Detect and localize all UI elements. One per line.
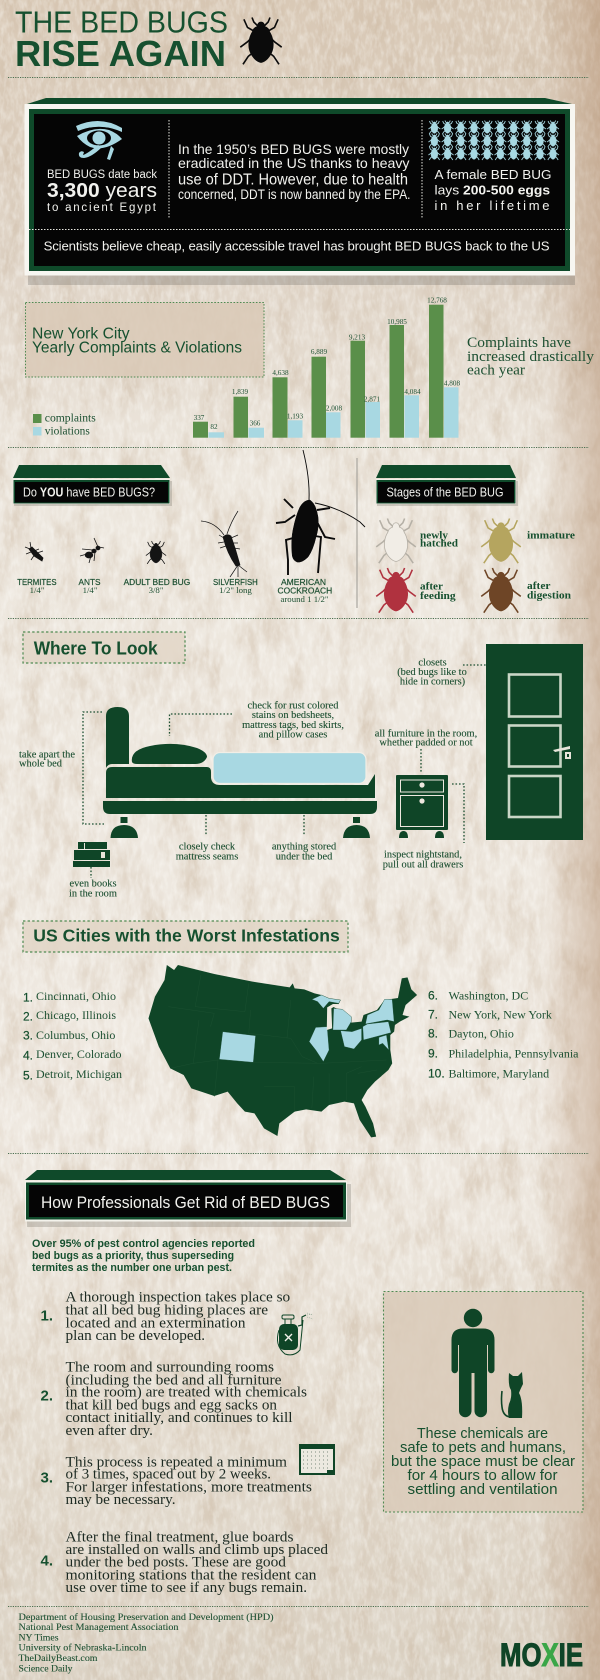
blue states [219, 995, 394, 1062]
city list 6-10: 7. [428, 1008, 438, 1022]
stage: immature: immature [527, 530, 576, 542]
step 3: of 3 times, spaced out by 2 weeks. [66, 1466, 271, 1482]
legend: violations [45, 426, 90, 438]
city list 1-5: 3. [23, 1028, 33, 1042]
city list 1-5: 1. [23, 990, 33, 1004]
stage: newly hatched [376, 518, 458, 563]
step 2 [40, 1360, 307, 1439]
insect labels: COCKROACH [278, 586, 332, 596]
bed callouts: under the bed [276, 852, 333, 862]
stage: after digestion: digestion [527, 590, 571, 602]
text: over 95%: Over 95% of pest control agencies reported [32, 1238, 255, 1250]
insect labels: 3/8" [149, 585, 164, 595]
city list 1-5: Cincinnati, Ohio [36, 989, 116, 1003]
city list 1-5: 5. [23, 1068, 33, 1082]
text: over 95%: termites as the number one urban pest. [32, 1262, 232, 1274]
city list 1-5: 4. [23, 1048, 33, 1062]
text: DDT history: eradicated in the US thanks to heavy [178, 155, 410, 171]
bar chart: 4,808 [444, 380, 460, 388]
text: over 95%: bed bugs as a priority, thus superseding [32, 1250, 234, 1262]
panel: safety note [384, 1292, 583, 1512]
sources [18, 1612, 274, 1674]
step 2: 2. [40, 1388, 53, 1404]
city list 6-10: New York, New York [448, 1008, 552, 1022]
step 3 [40, 1454, 312, 1508]
text: 3,300 years [47, 169, 157, 214]
stage: immature [481, 518, 576, 563]
icon: sprayer [277, 1313, 313, 1355]
bar chart: 6,889 [311, 348, 327, 356]
panel: New York City chart title: New York City [32, 326, 130, 342]
icon: calendar [299, 1444, 335, 1475]
text: DDT history [178, 141, 410, 202]
insect labels: SILVERFISH [213, 577, 258, 587]
insect labels: TERMITES [17, 577, 57, 587]
text: 3,300 years: BED BUGS date back [47, 169, 157, 181]
stage: after digestion: after [527, 581, 551, 592]
step 1: that all bed bug hiding places are [66, 1302, 268, 1318]
text: safety note: safe to pets and humans, [400, 1439, 566, 1456]
sources: NY Times [18, 1632, 59, 1644]
bed callouts: and pillow cases [259, 730, 327, 740]
icon: bed [103, 707, 377, 838]
logo: MOXIE: MOXIE [500, 1637, 583, 1673]
insect labels: around 1 1/2" [280, 594, 329, 604]
step 2: The room and surrounding rooms [66, 1360, 274, 1376]
city list 1-5: Chicago, Illinois [36, 1008, 116, 1022]
panel: New York City chart title: Yearly Complaints & Violations [32, 340, 242, 356]
icon: termite [25, 542, 43, 561]
bar chart: 12,768 [427, 296, 447, 304]
bed callouts: hide in corners) [400, 676, 465, 688]
bar chart: 4,638 [272, 369, 289, 377]
bed callouts: (bed bugs like to [397, 667, 467, 678]
bar chart [193, 296, 460, 438]
icon: person [452, 1309, 494, 1417]
title: RISE AGAIN [15, 33, 226, 74]
step 4: After the final treatment, glue boards [66, 1530, 294, 1546]
legend [33, 412, 96, 438]
legend: complaints [45, 412, 96, 424]
icon: cat [502, 1372, 523, 1418]
bed callouts: all furniture in the room, [375, 728, 477, 740]
step 4: under the bed posts. These are good [66, 1554, 287, 1570]
heading: Do YOU have BED BUGS [13, 465, 172, 506]
panel roof [27, 98, 572, 104]
icon: title bed bug [240, 18, 282, 64]
insect labels: 1/4" [30, 585, 45, 595]
text: egg count: lays 200-500 eggs [434, 184, 550, 198]
chart note: each year [467, 362, 525, 378]
step 4 [40, 1530, 329, 1596]
chart note [467, 335, 595, 378]
city list 6-10: 10. [428, 1066, 445, 1080]
heading: Do YOU have BED BUGS: Do YOU have BED BUGS? [23, 486, 155, 500]
bed callouts: mattress tags, bed skirts, [242, 720, 344, 731]
heading: US Cities [23, 921, 348, 952]
insect labels: 1/2" long [219, 585, 252, 595]
city list 6-10: 9. [428, 1046, 438, 1060]
bar chart: 9,213 [349, 334, 365, 342]
city list 1-5: 2. [23, 1010, 33, 1024]
icon: silverfish [201, 511, 247, 577]
step 1 [40, 1290, 290, 1344]
text: safety note: but the space must be clear [391, 1453, 575, 1470]
chart note: Complaints have [467, 335, 571, 351]
city list 1-5: Columbus, Ohio [36, 1028, 115, 1042]
city list 6-10: Baltimore, Maryland [448, 1066, 549, 1080]
step 4: are installed on walls and climb ups placed [66, 1542, 329, 1558]
step 3: may be necessary. [66, 1492, 176, 1508]
bed callouts: inspect nightstand, [384, 850, 462, 860]
bed callouts: pull out all drawers [383, 860, 463, 870]
city list 6-10: Philadelphia, Pennsylvania [448, 1046, 579, 1060]
city list 6-10: Dayton, Ohio [448, 1026, 514, 1040]
map: United States [148, 965, 417, 1137]
text: 3,300 years: to ancient Egypt [47, 202, 157, 214]
text: egg count [434, 167, 552, 213]
step 4: use over time to see if any bugs remain. [66, 1580, 307, 1596]
insect labels [17, 577, 332, 604]
text: safety note: settling and ventilation [408, 1481, 558, 1498]
city list 6-10 [428, 988, 579, 1080]
panel: bed bug history [24, 98, 575, 285]
icon: books [73, 842, 110, 867]
stage: newly hatched: hatched [420, 538, 458, 550]
step 4: monitoring stations that the resident can [66, 1568, 317, 1584]
step 2: in the room) are treated with chemicals [66, 1384, 307, 1400]
chart note: increased drastically [467, 349, 595, 365]
title: THE BED BUGS [15, 6, 228, 40]
insect labels: AMERICAN [281, 577, 326, 587]
icon: adult bed bug [146, 541, 166, 564]
heading: Where To Look: Where To Look [34, 638, 159, 658]
heading: How Professionals Get Rid of BED BUGS [25, 1170, 351, 1227]
step 3: 3. [40, 1470, 53, 1486]
bed callouts: check for rust colored [248, 700, 339, 712]
step 4: 4. [40, 1552, 53, 1570]
bed callouts: whether padded or not [379, 738, 473, 748]
bed callouts: mattress seams [176, 852, 238, 862]
bar chart: 337 [194, 414, 205, 422]
icon: nightstand [396, 775, 448, 838]
bed callouts: anything stored [272, 842, 337, 852]
heading: How Professionals Get Rid of BED BUGS: How Professionals Get Rid of BED BUGS [41, 1193, 330, 1212]
icon: door [486, 644, 583, 840]
sources: Science Daily [18, 1664, 73, 1674]
step 1: 1. [40, 1308, 53, 1324]
heading: Stages of the BED BUG [376, 465, 518, 506]
insect labels: ADULT BED BUG [124, 577, 190, 587]
text: safety note [391, 1425, 575, 1498]
text: DDT history: In the 1950’s BED BUGS were mostly [178, 141, 409, 157]
insect labels: 1/4" [83, 585, 98, 595]
text: egg count: in her lifetime [434, 198, 550, 213]
icon: eye of Horus [76, 121, 122, 160]
step 2: even after dry. [66, 1423, 153, 1439]
stage: after digestion [481, 568, 571, 613]
sources: TheDailyBeast.com [18, 1653, 98, 1664]
city list 1-5 [23, 989, 122, 1082]
bed callouts: stains on bedsheets, [252, 710, 334, 721]
step 3: This process is repeated a minimum [66, 1454, 288, 1470]
step 3: For larger infestations, more treatments [66, 1480, 312, 1496]
text: over 95% [32, 1238, 255, 1274]
text: safety note: for 4 hours to allow for [408, 1467, 558, 1484]
city list 1-5: Detroit, Michigan [36, 1067, 122, 1081]
bar chart: 2,008 [326, 404, 342, 412]
text: travel note: Scientists believe cheap, easily accessible travel has brought BED BUGS back to the US [44, 238, 550, 254]
sources: University of Nebraska-Lincoln [18, 1642, 147, 1654]
text: DDT history: use of DDT. However, due to health [178, 172, 408, 188]
text: egg count: A female BED BUG [434, 167, 552, 182]
bar chart: 4,084 [404, 388, 421, 396]
heading: US Cities: US Cities with the Worst Infestations [33, 926, 340, 946]
bar chart: 366 [250, 420, 261, 428]
step 1: located and an extermination [66, 1316, 246, 1332]
bar chart: 10,985 [387, 318, 407, 326]
icon: ant [80, 538, 104, 563]
bar chart: 1,193 [287, 412, 303, 420]
sources: National Pest Management Association [18, 1622, 179, 1633]
title [15, 6, 228, 74]
bed callouts: take apart the [19, 750, 75, 760]
bar chart: 82 [210, 423, 218, 431]
text: 3,300 years: 3,300 years [47, 180, 157, 202]
panel: New York City chart title [26, 302, 264, 377]
step 1: plan can be developed. [66, 1328, 205, 1344]
stage: after feeding [376, 568, 456, 613]
bed callouts: in the room [69, 888, 117, 900]
city list 1-5: Denver, Colorado [36, 1047, 122, 1061]
bar chart: 1,839 [232, 388, 248, 396]
sources: Department of Housing Preservation and Development (HPD) [18, 1612, 274, 1623]
city list 6-10: 6. [428, 988, 438, 1002]
bed callouts [19, 658, 486, 900]
heading: Stages of the BED BUG: Stages of the BED BUG [386, 486, 504, 500]
step 1: A thorough inspection takes place so [66, 1290, 290, 1306]
stage: after feeding: feeding [420, 591, 456, 602]
city list 6-10: Washington, DC [448, 988, 528, 1002]
step 2: contact initially, and continues to kill [66, 1410, 292, 1426]
insect labels: ANTS [78, 577, 101, 587]
heading: Where To Look [23, 632, 185, 663]
bed callouts: closely check [179, 842, 236, 852]
step 2: that kill bed bugs and egg sacks on [66, 1398, 278, 1414]
icon: American cockroach [276, 450, 365, 575]
bar chart: 2,871 [364, 396, 380, 404]
bed callouts: even books [69, 878, 117, 890]
city list 6-10: 8. [428, 1026, 438, 1040]
text: safety note: These chemicals are [417, 1425, 548, 1442]
bed callouts: closets [418, 658, 447, 668]
icon: bed bug egg grid [428, 120, 559, 160]
bed callouts: whole bed [19, 758, 63, 770]
step 2: (including the bed and all furniture [66, 1372, 282, 1388]
stage: after feeding: after [420, 582, 444, 592]
text: DDT history: concerned, DDT is now banned by the EPA. [178, 187, 410, 202]
stage: newly hatched: newly [420, 530, 448, 542]
